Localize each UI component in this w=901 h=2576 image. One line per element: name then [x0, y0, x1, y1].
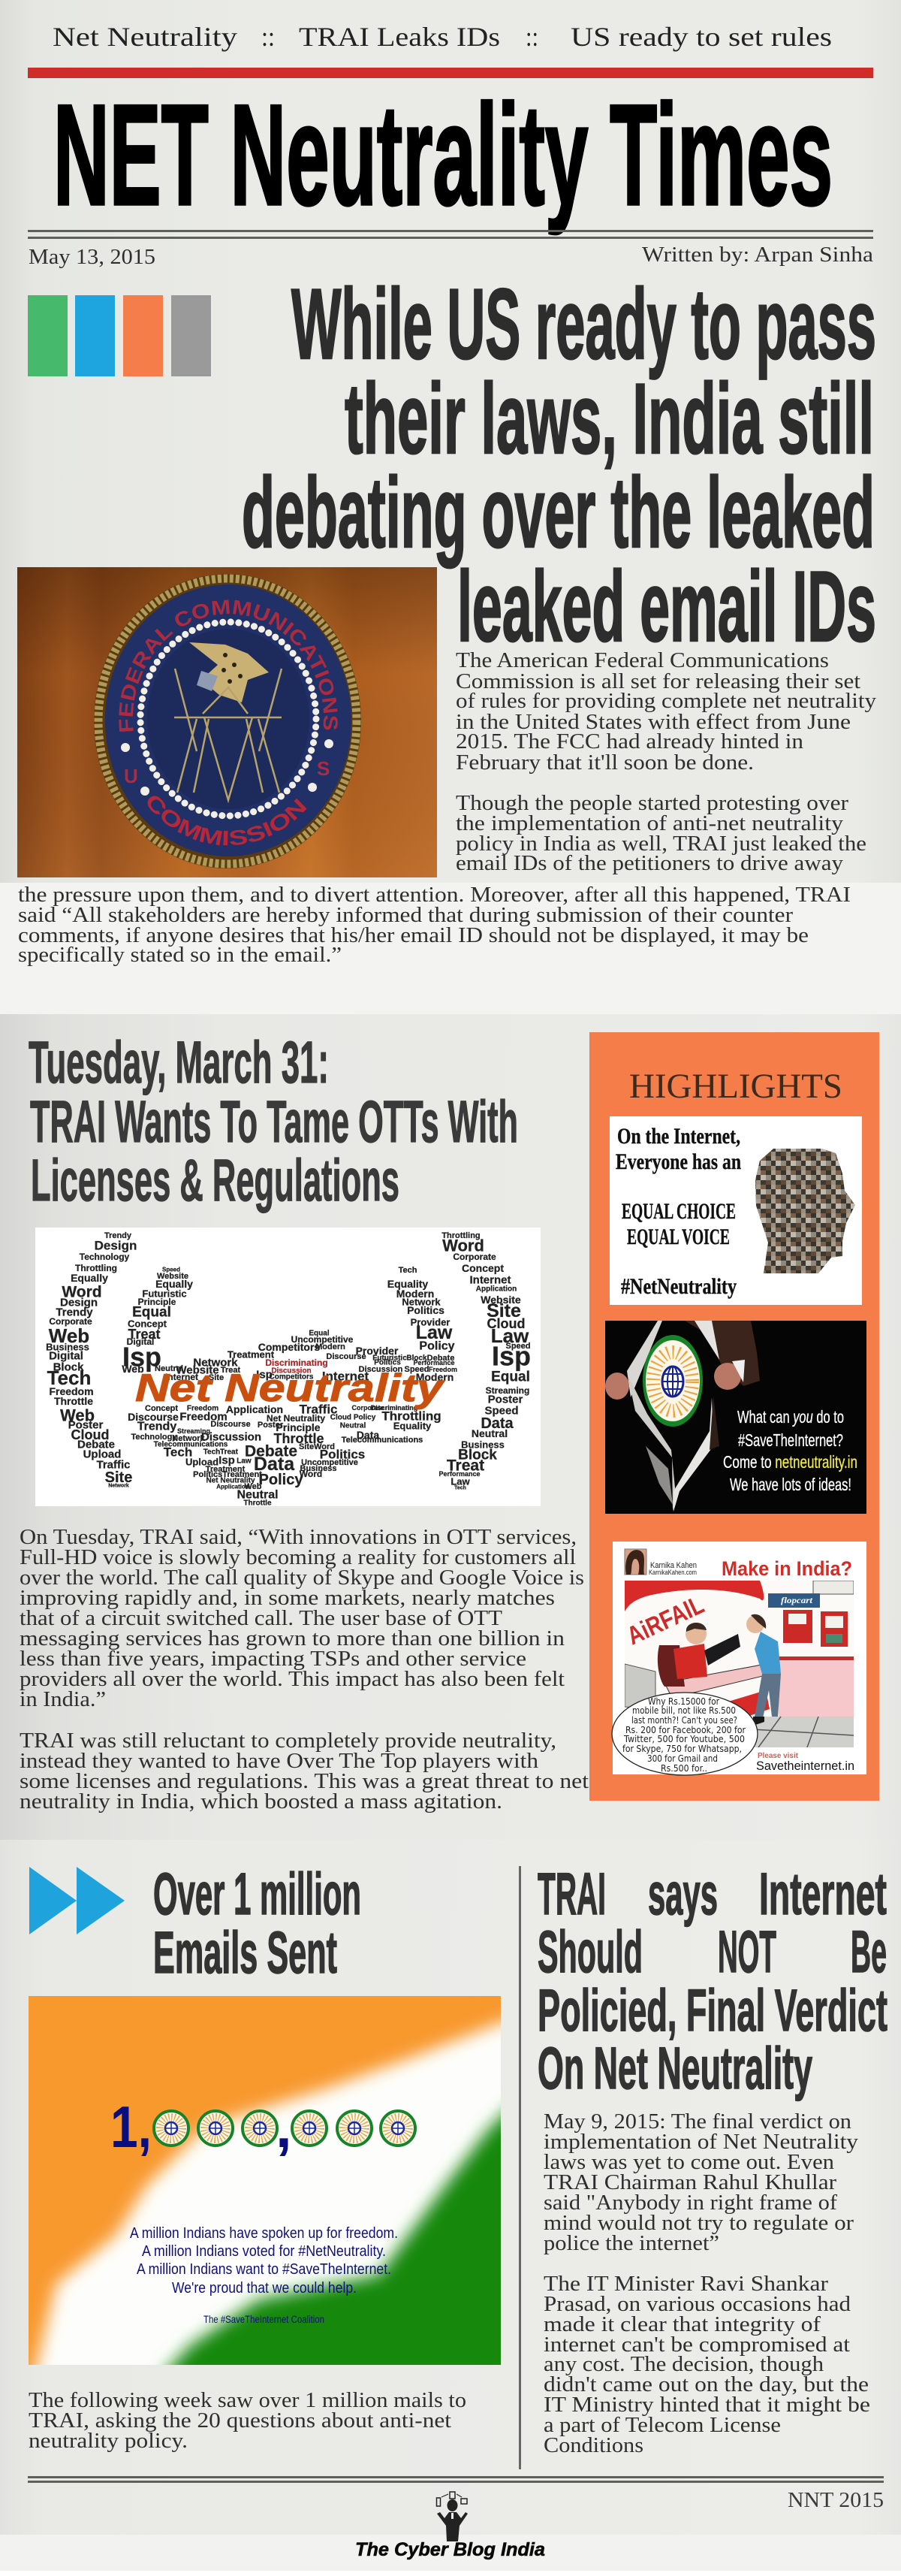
section heading: Tuesday March 31 [29, 1028, 518, 1213]
article text: million mails: TRAI, asking the 20 questions about anti-net [29, 2409, 451, 2433]
word cloud image: Discourse [326, 1352, 366, 1361]
word cloud image: Tech [47, 1367, 91, 1389]
word cloud image: Policy [419, 1340, 455, 1352]
word cloud image: Politics [407, 1304, 444, 1316]
word cloud image: Internet [322, 1369, 369, 1384]
article text: million mails: The following week saw over 1 million mails to [29, 2389, 466, 2412]
intro article text: comments, if anyone desires that his/her email ID should not be displayed, it may be [18, 924, 809, 947]
word cloud image: Futuristic [142, 1288, 187, 1300]
flag message: A million Indians have spoken up for freedom. [130, 2225, 398, 2242]
word cloud image: Application [226, 1403, 283, 1415]
word cloud image: Uncompetitive [301, 1458, 358, 1467]
word cloud image: Treat [220, 1448, 239, 1456]
word cloud image: Treat [447, 1457, 484, 1474]
word cloud centre: Net Neutrality: Net Neutrality [135, 1367, 446, 1410]
word cloud image: Futuristic [372, 1354, 407, 1363]
article text: final verdict: didn't came out on the day, but the [544, 2373, 869, 2396]
word cloud image: Data [481, 1415, 514, 1432]
word cloud image: Internet [469, 1274, 511, 1286]
heading: over 1 million emails sent [153, 1860, 361, 1986]
top navigation strip: US ready to set rules [571, 22, 832, 52]
masthead double rule [28, 230, 873, 239]
heading: TRAI says internet should not be policied [538, 1860, 887, 2101]
column divider [519, 1866, 521, 2469]
article text: final verdict: made it clear that integrity of [544, 2313, 821, 2336]
word cloud image: Throttle [243, 1499, 272, 1507]
word cloud image: Site [209, 1373, 224, 1382]
icon: fast forward arrows [29, 1867, 125, 1934]
word cloud image: Tech [164, 1445, 192, 1459]
speech bubble: 300 for Gmail and [647, 1753, 718, 1764]
word cloud image: Freedom [187, 1405, 218, 1412]
word cloud image: Poster [68, 1418, 104, 1432]
top navigation strip: Net Neutrality [53, 22, 237, 52]
highlight card: what can you do: We have lots of ideas! [730, 1475, 851, 1494]
intro article text: the pressure upon them, and to divert attention. Moreover, after all this happened, TRAI [18, 883, 851, 907]
highlight card: make in India cartoon: Savetheinternet.in [756, 1759, 854, 1773]
photo: FCC seal: FEDERAL COMMUNICATIONS [119, 599, 338, 732]
cartoonist portrait [625, 1549, 646, 1575]
word cloud image: Law [450, 1475, 471, 1487]
footer double rule [28, 2476, 884, 2483]
article text: final verdict: IT Ministry hinted that it might be [544, 2393, 870, 2417]
word cloud image: Concept [128, 1318, 167, 1330]
word cloud image: Neutral [340, 1421, 366, 1430]
article text: OTT services: Full-HD voice is slowly becoming a reality for customers all [20, 1546, 576, 1569]
word cloud image: Technology [131, 1433, 177, 1442]
highlight card: make in India cartoon [612, 1542, 866, 1775]
heading: TRAI says internet should not be policied: says [648, 1860, 718, 1927]
footer brand: The Cyber Blog India [355, 2539, 545, 2560]
icon: head collage [755, 1149, 855, 1273]
photo: FCC seal [17, 567, 437, 877]
highlight card: equal choice equal voice: #NetNeutrality [621, 1274, 737, 1299]
intro article text: of rules for providing complete net neutrality [456, 690, 876, 713]
word cloud image: Application [476, 1285, 517, 1294]
article text: OTT services: TRAI was still reluctant to completely provide neutrality, [20, 1729, 556, 1753]
word cloud image: Politics [374, 1358, 401, 1367]
word cloud image: Discourse [128, 1411, 179, 1423]
word cloud image: Speed [484, 1405, 519, 1417]
icon: hands [605, 1373, 629, 1400]
article text: OTT services: neutrality in India, which boosted a mass agitation. [20, 1790, 502, 1813]
word cloud image: Debate [245, 1442, 297, 1460]
article text: final verdict [544, 2110, 870, 2457]
highlight card: make in India cartoon: Please visit [758, 1752, 799, 1760]
word cloud image: Data [357, 1429, 379, 1441]
byline: Written by: Arpan Sinha [642, 243, 874, 267]
image: one million flag [29, 1996, 501, 2365]
word cloud image: Modern [396, 1288, 434, 1300]
photo: FCC seal: S [317, 757, 330, 780]
word cloud image: Policy [259, 1472, 303, 1488]
article text: final verdict: said "Anybody in right frame of [544, 2191, 838, 2215]
word cloud image: Performance [438, 1470, 481, 1478]
word cloud image: Discriminating [371, 1404, 417, 1412]
word cloud image: Network [108, 1483, 129, 1489]
word cloud image: Provider [411, 1316, 450, 1328]
word cloud image: Net Neutrality [267, 1413, 325, 1424]
highlight card: what can you do: #SaveTheInternet? [738, 1430, 843, 1450]
icon: cyber blog logo figure [437, 2492, 468, 2541]
speech bubble: for Skype, 750 for Whatsapp, [622, 1744, 742, 1754]
word cloud image: Law [416, 1322, 453, 1343]
word cloud image: Business [46, 1342, 89, 1352]
word cloud image: Isp [256, 1369, 273, 1381]
word cloud image: Equal [491, 1369, 530, 1385]
article text: final verdict: mind would not try to regulate or [544, 2212, 854, 2235]
article text: final verdict: Prasad, on various occasions had [544, 2293, 851, 2316]
colour bars icon [28, 295, 211, 376]
flag message: We're proud that we could help. [172, 2280, 357, 2297]
word cloud image: Tech [399, 1266, 417, 1275]
article text: OTT services: over the world. The call quality of Skype and Google Voice is [20, 1566, 584, 1590]
intro article text: policy in India as well, TRAI just leaked the [456, 832, 866, 856]
article text: final verdict: any cost. The decision, though [544, 2353, 824, 2376]
word cloud image: Cloud [487, 1316, 526, 1331]
word cloud image: Net Neutrality [206, 1477, 255, 1484]
word cloud image: Poster [258, 1421, 284, 1430]
word cloud image: Discussion [271, 1367, 312, 1375]
word cloud image: Principle [138, 1297, 176, 1307]
word cloud image: Debate [77, 1438, 115, 1451]
word cloud image: Traffic [299, 1402, 338, 1417]
word cloud image: Modern [315, 1342, 345, 1351]
flag message: The #SaveTheInternet Coalition [203, 2313, 324, 2325]
intro article text: Commission is all set for releasing their set [456, 670, 860, 693]
word cloud image: Tech [454, 1486, 466, 1490]
highlight card: make in India cartoon: KarnikaKahen.com [649, 1569, 697, 1576]
top navigation strip: :: [526, 22, 538, 52]
word cloud image: Website [176, 1364, 219, 1376]
word cloud image: Throttle [54, 1395, 93, 1407]
article text: final verdict: a part of Telecom License [544, 2414, 781, 2437]
highlight card: equal choice equal voice: EQUAL CHOICE [622, 1199, 736, 1224]
word cloud image: Throttling [75, 1263, 117, 1273]
word cloud image: Equally [71, 1272, 108, 1284]
speech bubble: Twitter, 500 for Youtube, 500 [623, 1734, 745, 1744]
word cloud image: Treatment [206, 1465, 246, 1474]
intro article text [18, 649, 876, 967]
highlights heading: HIGHLIGHTS [629, 1067, 842, 1106]
word cloud image: Discussion [201, 1430, 261, 1444]
word cloud image: Speed [404, 1365, 429, 1374]
word cloud image: Throttling [381, 1409, 441, 1423]
word cloud image: Block [458, 1447, 497, 1463]
intro article text: in the United States with effect from June [456, 711, 851, 734]
cartoon scene [622, 1581, 854, 1747]
word cloud image: Traffic [96, 1459, 131, 1471]
word cloud image: Business [461, 1439, 505, 1450]
word cloud image: Block [53, 1361, 84, 1373]
word cloud image: Treat [128, 1327, 161, 1342]
word cloud image: Website [481, 1294, 521, 1306]
airline logo text: AiRFAIL [622, 1590, 708, 1650]
word cloud image: Equal [309, 1330, 330, 1337]
word cloud image: Internet [165, 1372, 198, 1382]
highlight card: make in India cartoon: Karnika Kahen [650, 1561, 697, 1570]
article text: final verdict: May 9, 2015: The final verdict on [544, 2110, 851, 2134]
heading: over 1 million emails sent: Emails Sent [153, 1919, 337, 1986]
intro article text: 2015. The FCC had already hinted in [456, 730, 803, 753]
word cloud image: Block [406, 1354, 427, 1363]
word cloud image: Web [244, 1482, 262, 1491]
article text: final verdict: TRAI Chairman Rahul Khullar [544, 2171, 837, 2194]
article text: million mails [29, 2389, 466, 2453]
word cloud image: Telecommunications [154, 1441, 228, 1448]
word cloud image: Business [300, 1464, 336, 1473]
intro article text: email IDs of the petitioners to drive away [456, 852, 843, 875]
article text: million mails: neutrality policy. [29, 2430, 188, 2453]
word cloud image: Word [442, 1237, 484, 1255]
main headline [242, 269, 876, 663]
intro article text: Though the people started protesting over [456, 792, 849, 815]
word cloud image: Telecommunications [342, 1436, 423, 1445]
heading: TRAI says internet should not be policied: TRAI [538, 1860, 606, 1927]
word cloud image: Debate [427, 1354, 454, 1363]
word cloud image: Uncompetitive [291, 1334, 354, 1345]
flag message: A million Indians want to #SaveTheInternet. [137, 2261, 391, 2278]
word cloud image: Cloud [71, 1427, 110, 1442]
photo: FCC seal: U [124, 765, 138, 787]
article text: final verdict: laws was yet to come out. Even [544, 2151, 834, 2174]
article text: OTT services: less than five years, impacting TSPs and other service [20, 1647, 526, 1671]
article text: OTT services: providers all over the world. This impact has also been felt [20, 1668, 565, 1691]
article text: OTT services [20, 1526, 589, 1813]
word cloud image: Competitors [258, 1341, 320, 1353]
intro article text: said “All stakeholders are hereby informed that during submission of their counter [18, 904, 794, 927]
million counter: , [276, 2094, 292, 2160]
word cloud image: PoliticsTreatment [193, 1470, 262, 1479]
word cloud image: Concept [145, 1404, 178, 1413]
word cloud image: Discourse [210, 1420, 251, 1429]
highlight card: equal choice equal voice: EQUAL VOICE [627, 1225, 730, 1249]
word cloud image: Throttling [441, 1231, 481, 1240]
flag message [130, 2225, 398, 2325]
highlight card: make in India cartoon: Make in India? [722, 1557, 852, 1580]
highlight card: what can you do [605, 1321, 866, 1514]
word cloud image: Data [254, 1454, 295, 1475]
article text: OTT services: improving rapidly and, in some markets, nearly matches [20, 1587, 555, 1610]
word cloud image: Modern [416, 1371, 454, 1383]
word cloud image: Isp [218, 1454, 235, 1466]
article text: OTT services: On Tuesday, TRAI said, “With innovations in OTT services, [20, 1526, 577, 1549]
word cloud image: Application [216, 1483, 249, 1490]
word cloud image: Speed [162, 1267, 180, 1273]
word cloud image: Network [402, 1297, 441, 1307]
highlight card: what can you do: Come to netneutrality.in [723, 1452, 857, 1472]
word cloud image: Digital [49, 1349, 83, 1363]
speech bubble: mobile bill, not like Rs.500 [632, 1705, 736, 1716]
word cloud image: Trendy [137, 1420, 176, 1433]
million counter: 1, [110, 2094, 152, 2160]
word cloud image [35, 1228, 541, 1507]
section heading: Tuesday March 31: Tuesday, March 31: [29, 1028, 329, 1095]
article text: OTT services: that of a circuit switched call. The user base of OTT [20, 1607, 502, 1630]
word cloud image: Principle [276, 1421, 321, 1433]
word cloud image: Streaming [486, 1385, 529, 1396]
heading: over 1 million emails sent: Over 1 million [153, 1860, 361, 1927]
heading: TRAI says internet should not be policied: Should [538, 1918, 643, 1985]
highlight card: equal choice equal voice: On the Internet, [617, 1124, 740, 1149]
word cloud image: Isp [492, 1340, 531, 1372]
word cloud image: Website [157, 1272, 188, 1281]
cartoon scene: flopcart [781, 1595, 813, 1605]
word cloud image: Streaming [177, 1427, 210, 1435]
flag message: A million Indians voted for #NetNeutrality. [142, 2243, 386, 2260]
word cloud image: Competitors [270, 1373, 314, 1381]
word cloud image: Equal [132, 1304, 171, 1321]
word cloud image: Cloud Policy [330, 1414, 376, 1421]
word cloud image: Upload [83, 1448, 121, 1460]
word cloud image: Design [95, 1238, 137, 1253]
word cloud image: Neutral [155, 1364, 183, 1373]
word cloud image: Corporate [49, 1316, 92, 1327]
highlight card: equal choice equal voice: Everyone has an [616, 1149, 741, 1174]
word cloud image: Web [60, 1406, 95, 1424]
article text: final verdict: implementation of Net Neutrality [544, 2131, 858, 2154]
intro article text: February that it'll soon be done. [456, 751, 754, 775]
word cloud image: Neutral [472, 1427, 508, 1439]
word cloud image: Concept [462, 1262, 504, 1274]
section heading: Tuesday March 31: Licenses & Regulations [31, 1146, 399, 1213]
speech bubble: Rs. 200 for Facebook, 200 for [625, 1725, 746, 1735]
word cloud image: Throttle [273, 1431, 324, 1446]
word cloud image: Isp [122, 1342, 161, 1372]
word cloud image: SiteWord [299, 1442, 335, 1451]
article text: final verdict: internet can't be compromised at [544, 2333, 850, 2357]
word cloud image: Equality [387, 1278, 428, 1290]
word cloud image: Web [122, 1363, 144, 1375]
top navigation strip: TRAI Leaks IDs [299, 22, 500, 52]
word cloud image: Speed [505, 1342, 531, 1351]
heading: TRAI says internet should not be policied: NOT [718, 1918, 776, 1985]
word cloud image: Discussion [359, 1365, 403, 1374]
word cloud image: Equality [393, 1420, 432, 1432]
section heading: Tuesday March 31: TRAI Wants To Tame OTTs With [30, 1088, 518, 1155]
word cloud image: Discriminating [265, 1357, 328, 1368]
word cloud image: Site [487, 1300, 521, 1321]
highlight card: equal choice equal voice [610, 1116, 862, 1305]
word cloud image: Network [172, 1434, 206, 1443]
red rule [28, 68, 873, 78]
word cloud image: Treatment [228, 1349, 275, 1360]
word cloud image: Tech [203, 1448, 220, 1456]
word cloud image: Upload [185, 1456, 218, 1468]
intro article text: specifically stated so in the email.” [18, 944, 342, 967]
word cloud image: Trendy [56, 1306, 93, 1319]
word cloud image: Freedom [49, 1385, 94, 1397]
date: May 13, 2015 [29, 246, 155, 269]
speech bubble [612, 1693, 758, 1775]
word cloud image: Design [60, 1297, 98, 1309]
article text: OTT services: instead they wanted to have Over The Top players with [20, 1750, 538, 1773]
speech bubble: Why Rs.15000 for [648, 1696, 719, 1707]
million counter [110, 2094, 415, 2160]
word cloud image: Neutral [237, 1489, 279, 1501]
highlight card: what can you do: What can you do to [737, 1407, 844, 1427]
word cloud image: Law [237, 1457, 252, 1465]
word cloud image: Digital [127, 1336, 154, 1347]
article text: OTT services: in India.” [20, 1688, 106, 1711]
word cloud image: Freedom [179, 1411, 228, 1423]
article text: OTT services: some licenses and regulations. This was a great threat to net [20, 1770, 589, 1793]
word cloud image: Word [300, 1469, 322, 1479]
word cloud image: Word [62, 1283, 102, 1301]
word cloud image: Site [105, 1469, 132, 1486]
word cloud image: Poster [488, 1393, 523, 1406]
article text: final verdict: Conditions [544, 2434, 643, 2457]
speech bubble: last month?! Can't you see? [631, 1715, 737, 1726]
article text: OTT services: messaging services has grown to more than one billion in [20, 1627, 565, 1650]
speech bubble: Rs.500 for.. [661, 1763, 707, 1774]
icon: chakra on chest [643, 1335, 703, 1427]
word cloud image: Freedom [429, 1366, 457, 1373]
top navigation strip [53, 22, 832, 52]
word cloud image: Provider [356, 1345, 399, 1357]
panel: highlights [589, 1032, 879, 1801]
word cloud image: Web [49, 1324, 89, 1347]
intro article text: the implementation of anti-net neutrality [456, 812, 843, 835]
footer edition mark: NNT 2015 [788, 2488, 884, 2512]
photo: FCC seal: COMMISSION [147, 796, 306, 846]
article text: final verdict: police the internet” [544, 2232, 719, 2255]
top navigation strip: :: [261, 22, 275, 52]
word cloud image: Network [193, 1357, 238, 1369]
word cloud image: Equally [155, 1278, 193, 1290]
word cloud image: Technology [80, 1252, 130, 1262]
word cloud image: Treat [221, 1366, 240, 1375]
word cloud image: Corporate [453, 1252, 496, 1262]
word cloud image: Performance [413, 1359, 455, 1367]
word cloud image: Politics [320, 1447, 365, 1462]
seal emblem: eagle and tower [174, 642, 282, 800]
article text: final verdict: The IT Minister Ravi Shankar [544, 2272, 829, 2296]
word cloud image: Corporate [351, 1404, 384, 1412]
word cloud image: Trendy [104, 1231, 132, 1240]
word cloud image: Law [491, 1324, 529, 1347]
intro article text: The American Federal Communications [456, 649, 829, 672]
